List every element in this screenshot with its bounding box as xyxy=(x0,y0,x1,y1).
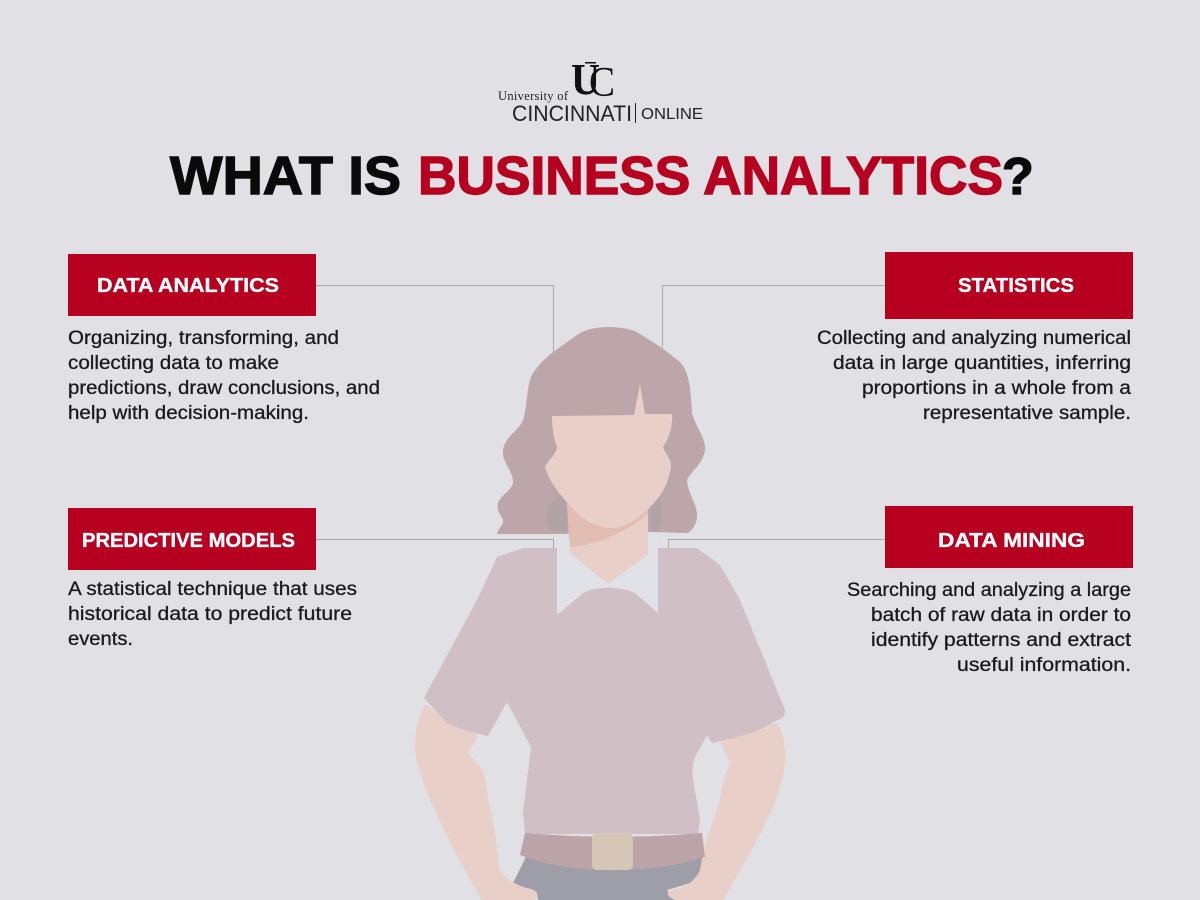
panel: statistics: representative sample. xyxy=(923,402,1131,424)
panel: data analytics: predictions, draw conclusions, and xyxy=(68,377,380,399)
panel: data mining: DATA MINING xyxy=(938,529,1085,552)
logo: University of Cincinnati Online: U xyxy=(571,55,600,104)
face xyxy=(545,384,672,528)
neck xyxy=(567,500,648,584)
panel: statistics: proportions in a whole from a xyxy=(862,377,1131,399)
connector lines xyxy=(316,286,885,550)
panel: data mining: batch of raw data in order to xyxy=(871,604,1131,626)
panel: data mining: Searching and analyzing a large xyxy=(847,579,1131,601)
trousers xyxy=(513,855,706,900)
logo: University of Cincinnati Online: ONLINE xyxy=(641,106,703,123)
panel: data analytics: DATA ANALYTICS xyxy=(97,274,279,297)
logo: University of Cincinnati Online: CINCINNATI xyxy=(512,101,632,126)
hair xyxy=(497,327,705,534)
belt xyxy=(520,833,705,870)
collar xyxy=(557,537,658,615)
panel: data mining xyxy=(847,506,1133,676)
panel: statistics: Collecting and analyzing numerical xyxy=(817,327,1131,349)
logo: University of Cincinnati Online: University of xyxy=(498,89,569,103)
logo: University of Cincinnati Online: C xyxy=(589,60,615,106)
panel: statistics xyxy=(817,252,1133,424)
panel: data analytics: help with decision-making. xyxy=(68,402,309,424)
shirt xyxy=(424,548,785,834)
panel: predictive models xyxy=(68,508,357,650)
panel: data mining: identify patterns and extract xyxy=(871,629,1132,651)
title: ? xyxy=(1002,148,1034,206)
panel: data analytics xyxy=(68,254,380,424)
ear shadows xyxy=(546,490,662,532)
illustration: woman figure xyxy=(415,327,785,900)
panel: data analytics: Organizing, transforming, and xyxy=(68,327,339,349)
panel: data analytics: collecting data to make xyxy=(68,352,279,374)
right arm xyxy=(668,723,785,900)
title xyxy=(170,146,1034,206)
panel: predictive models: historical data to predict future xyxy=(68,603,352,625)
title: WHAT IS xyxy=(170,146,401,206)
logo: University of Cincinnati Online xyxy=(498,55,703,126)
panel: predictive models: A statistical technique that uses xyxy=(68,578,357,600)
neck shadow xyxy=(567,503,648,547)
panel: statistics: data in large quantities, inferring xyxy=(833,352,1131,374)
panel: predictive models: events. xyxy=(68,628,133,650)
panel: statistics: STATISTICS xyxy=(958,274,1074,297)
belt buckle xyxy=(592,833,633,870)
panel: predictive models: PREDICTIVE MODELS xyxy=(82,529,295,552)
title: BUSINESS ANALYTICS xyxy=(418,146,1003,206)
left arm xyxy=(415,705,537,900)
panel: data mining: useful information. xyxy=(957,654,1131,676)
